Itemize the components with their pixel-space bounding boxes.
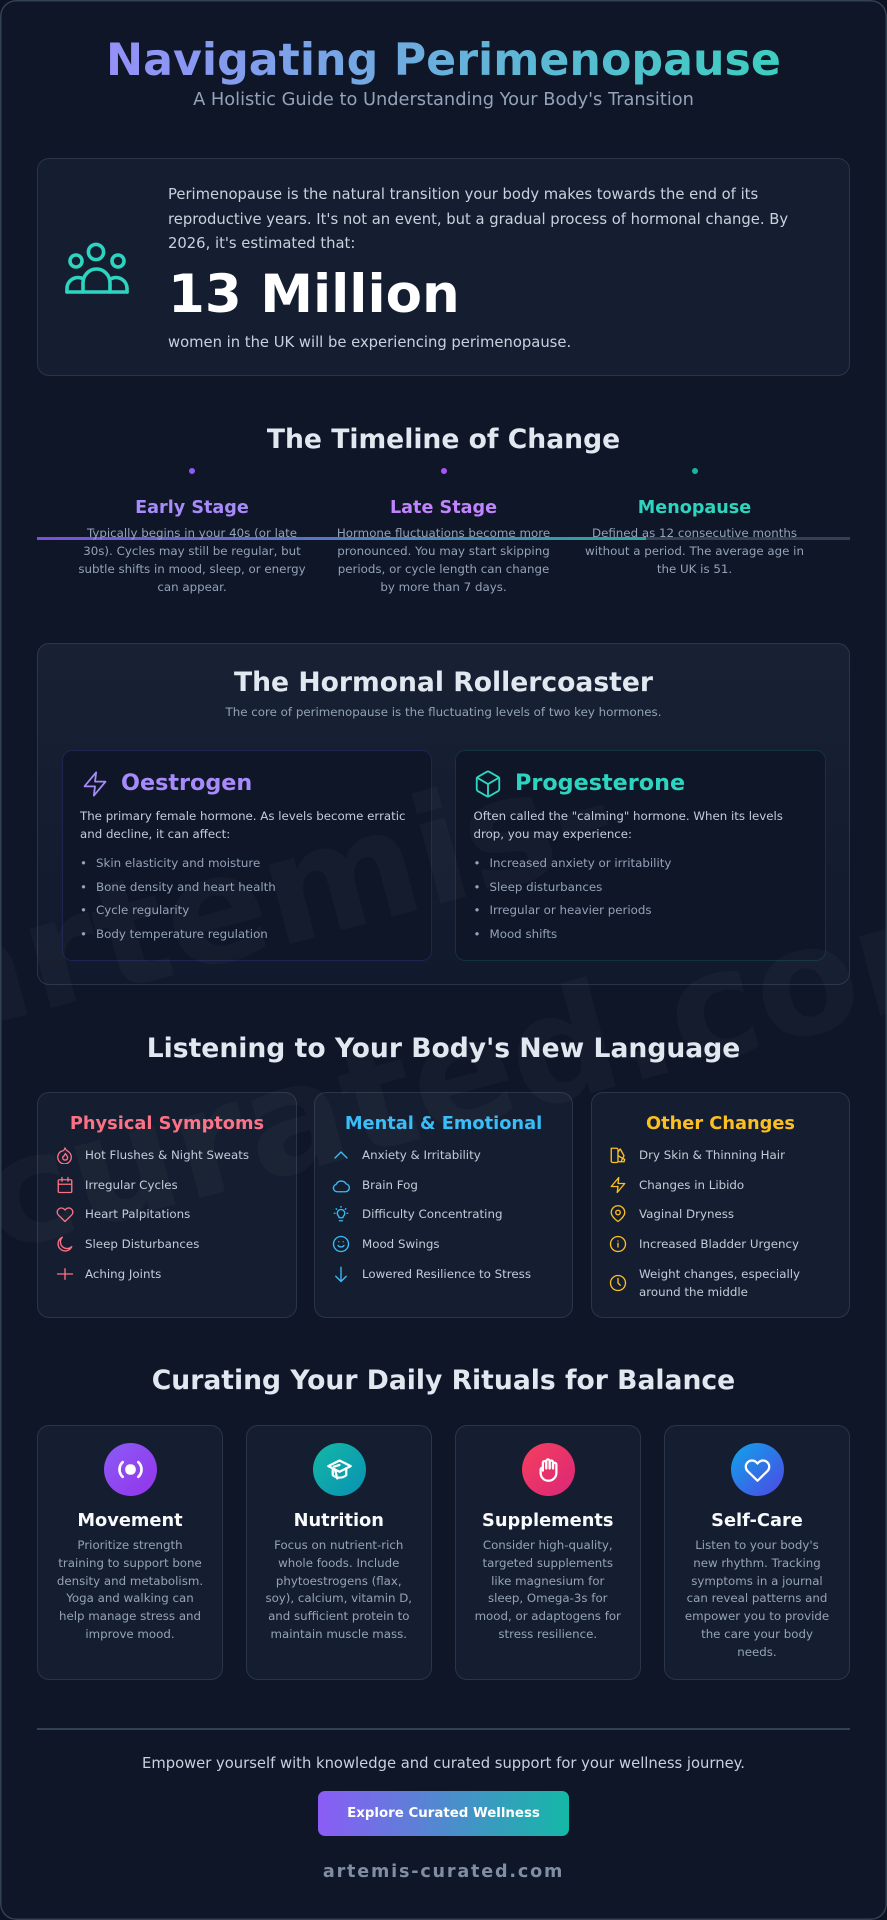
website address: artemis-curated.com <box>323 1862 564 1882</box>
intro text: Perimenopause is the natural transition your body makes towards the end of its <box>168 186 758 203</box>
ritual description: empower you to provide <box>685 1609 829 1623</box>
symptom: Hot Flushes & Night Sweats <box>85 1148 249 1162</box>
stage description: Typically begins in your 40s (or late <box>87 526 297 540</box>
stage description: the UK is 51. <box>657 562 732 576</box>
ritual name: Self-Care <box>711 1510 803 1531</box>
effects list: Cycle regularity <box>96 903 189 917</box>
stage marker <box>440 468 446 474</box>
ritual name: Supplements <box>482 1510 613 1531</box>
heading: timeline: The Timeline of Change <box>267 424 620 455</box>
stage description: without a period. The average age in <box>585 544 804 558</box>
icon: group of people <box>65 242 129 294</box>
ritual description: like magnesium for <box>491 1574 604 1588</box>
description: and decline, it can affect: <box>80 826 230 840</box>
panel: supplements <box>455 1425 640 1680</box>
icon: info <box>610 1236 626 1252</box>
icon: lightning bolt <box>84 772 106 796</box>
intro text: 2026, it's estimated that: <box>168 235 355 252</box>
effects list: • <box>80 856 87 870</box>
effects list: • <box>474 880 480 894</box>
effects list: • <box>474 856 480 870</box>
panel: hormonal rollercoaster <box>37 643 850 985</box>
ritual description: mood, or adaptogens for <box>475 1609 621 1623</box>
symptom: Dry Skin & Thinning Hair <box>639 1148 785 1162</box>
effects list: Irregular or heavier periods <box>490 903 652 917</box>
effects list: Sleep disturbances <box>490 880 602 894</box>
panel: intro statistic <box>37 158 850 376</box>
stage description: periods, or cycle length can change <box>338 562 549 576</box>
icon: supplements badge <box>522 1443 575 1496</box>
stage description: can appear. <box>157 580 227 594</box>
icon: location pin <box>610 1205 626 1222</box>
stage marker <box>189 468 195 474</box>
heading: The Hormonal Rollercoaster <box>234 667 653 698</box>
effects list: • <box>474 903 480 917</box>
icon: swatch <box>610 1148 626 1164</box>
ritual description: help manage stress and <box>59 1609 201 1623</box>
symptom: around the middle <box>639 1284 748 1298</box>
footer message: Empower yourself with knowledge and curated support for your wellness journey. <box>142 1755 745 1772</box>
heading: rituals: Curating Your Daily Rituals for Balance <box>152 1365 735 1396</box>
symptom: Lowered Resilience to Stress <box>362 1266 531 1280</box>
symptom: Heart Palpitations <box>85 1206 190 1220</box>
icon: arrow down <box>335 1266 347 1282</box>
icon: nutrition badge <box>312 1443 366 1496</box>
icon: flame <box>57 1147 72 1164</box>
ritual description: maintain muscle mass. <box>270 1627 407 1641</box>
stage: late <box>337 468 550 594</box>
icon: clock <box>610 1274 626 1292</box>
panel: physical symptoms <box>37 1092 297 1318</box>
stage title: Menopause <box>638 498 751 518</box>
panel: movement <box>37 1425 223 1680</box>
timeline track <box>37 537 850 540</box>
effects list: Bone density and heart health <box>96 880 276 894</box>
icon: self-care badge <box>730 1443 784 1496</box>
description <box>474 808 783 840</box>
stage description: subtle shifts in mood, sleep, or energy <box>78 562 306 576</box>
ritual description <box>685 1538 829 1659</box>
effects list: Mood shifts <box>490 927 557 941</box>
stage description <box>585 526 804 576</box>
icon: box <box>476 770 500 798</box>
stage description: 30s). Cycles may still be regular, but <box>83 544 301 558</box>
ritual description: density and metabolism. <box>57 1574 203 1588</box>
symptom: Changes in Libido <box>639 1178 744 1192</box>
ritual description: Focus on nutrient-rich <box>274 1538 403 1552</box>
call to action button <box>318 1791 569 1836</box>
ritual description: Prioritize strength <box>77 1538 183 1552</box>
ritual name: Nutrition <box>294 1510 384 1531</box>
ritual description <box>57 1538 203 1641</box>
key figure: 13 Million <box>168 264 460 325</box>
ritual description: the care your body <box>701 1627 813 1641</box>
symptom: Difficulty Concentrating <box>362 1206 502 1220</box>
description: Often called the "calming" hormone. When its levels <box>474 808 783 822</box>
figure caption: women in the UK will be experiencing perimenopause. <box>168 334 571 351</box>
description: The primary female hormone. As levels become erratic <box>80 808 406 822</box>
ritual description: sleep, Omega-3s for <box>488 1591 608 1605</box>
column title: Other Changes <box>646 1112 795 1134</box>
ritual description <box>265 1538 412 1641</box>
intro text <box>168 186 788 252</box>
effects list: • <box>80 927 87 941</box>
ritual description: whole foods. Include <box>278 1556 399 1570</box>
description: drop, you may experience: <box>474 826 632 840</box>
ritual description: Yoga and walking can <box>66 1591 194 1605</box>
hormone name: Progesterone <box>515 770 685 796</box>
stage description: Defined as 12 consecutive months <box>592 526 797 540</box>
icon: light bulb <box>334 1206 348 1222</box>
stage: early <box>78 468 306 594</box>
ritual description: improve mood. <box>85 1627 175 1641</box>
symptom: Sleep Disturbances <box>85 1236 199 1250</box>
card: progesterone <box>455 750 826 961</box>
stage title: Early Stage <box>135 498 249 518</box>
ritual description: targeted supplements <box>482 1556 613 1570</box>
symptom: Irregular Cycles <box>85 1178 178 1192</box>
effects list: • <box>80 903 87 917</box>
ritual name: Movement <box>77 1510 183 1531</box>
effects list: Skin elasticity and moisture <box>96 856 260 870</box>
section intro: The core of perimenopause is the fluctuating levels of two key hormones. <box>226 705 661 719</box>
heading: symptoms: Listening to Your Body's New Language <box>147 1033 740 1064</box>
column title: Physical Symptoms <box>70 1112 264 1134</box>
card: oestrogen <box>62 750 432 961</box>
icon: movement badge <box>104 1443 156 1496</box>
effects list: • <box>474 927 480 941</box>
footer divider <box>37 1728 850 1730</box>
icon: plus <box>56 1268 74 1280</box>
effects list: Increased anxiety or irritability <box>490 856 671 870</box>
icon: cloud <box>332 1180 350 1192</box>
symptom <box>639 1266 800 1298</box>
symptom: Increased Bladder Urgency <box>639 1236 799 1250</box>
ritual description: stress resilience. <box>498 1627 597 1641</box>
stage description: by more than 7 days. <box>380 580 507 594</box>
effects list: Body temperature regulation <box>96 927 268 941</box>
hormone name: Oestrogen <box>121 770 252 796</box>
symptom: Brain Fog <box>362 1178 418 1192</box>
call to action button: Explore Curated Wellness <box>347 1806 540 1821</box>
icon: lightning <box>610 1176 626 1194</box>
icon: heart <box>56 1207 74 1222</box>
panel: nutrition <box>246 1425 432 1680</box>
ritual description: needs. <box>737 1645 777 1659</box>
stage marker <box>692 468 698 474</box>
symptom: Anxiety & Irritability <box>362 1148 481 1162</box>
panel: mental and emotional <box>314 1092 573 1318</box>
stage description <box>337 526 550 594</box>
description <box>80 808 406 840</box>
background watermark <box>0 519 887 1310</box>
ritual description <box>475 1538 621 1641</box>
effects list <box>474 856 671 941</box>
icon: smile <box>332 1236 350 1252</box>
stage description: Hormone fluctuations become more <box>337 526 550 540</box>
panel: self-care <box>664 1425 850 1680</box>
ritual description: new rhythm. Tracking <box>693 1556 821 1570</box>
effects list <box>80 856 276 941</box>
intro text: reproductive years. It's not an event, but a gradual process of hormonal change. By <box>168 210 788 228</box>
subtitle: A Holistic Guide to Understanding Your Body's Transition <box>193 89 694 110</box>
icon: moon <box>57 1236 72 1252</box>
title: Navigating Perimenopause <box>106 34 781 86</box>
ritual description: phytoestrogens (flax, <box>276 1574 402 1588</box>
stage description <box>78 526 306 594</box>
ritual description: soy), calcium, vitamin D, <box>265 1591 412 1605</box>
ritual description: can reveal patterns and <box>687 1591 827 1605</box>
ritual description: symptoms in a journal <box>691 1574 823 1588</box>
ritual description: training to support bone <box>58 1556 202 1570</box>
stage description: pronounced. You may start skipping <box>337 544 550 558</box>
effects list: • <box>80 880 87 894</box>
ritual description: Consider high-quality, <box>483 1538 613 1552</box>
symptom: Mood Swings <box>362 1236 440 1250</box>
symptom: Weight changes, especially <box>639 1266 800 1280</box>
column title: Mental & Emotional <box>345 1112 542 1134</box>
panel: other changes <box>591 1092 850 1318</box>
ritual description: and sufficient protein to <box>268 1609 409 1623</box>
timeline chart <box>37 468 850 594</box>
icon: chevron up <box>334 1151 348 1159</box>
icon: calendar <box>58 1176 72 1194</box>
symptom: Vaginal Dryness <box>639 1206 734 1220</box>
symptom: Aching Joints <box>85 1266 161 1280</box>
stage title: Late Stage <box>390 498 497 518</box>
stage: menopause <box>585 468 804 576</box>
ritual description: Listen to your body's <box>695 1538 819 1552</box>
